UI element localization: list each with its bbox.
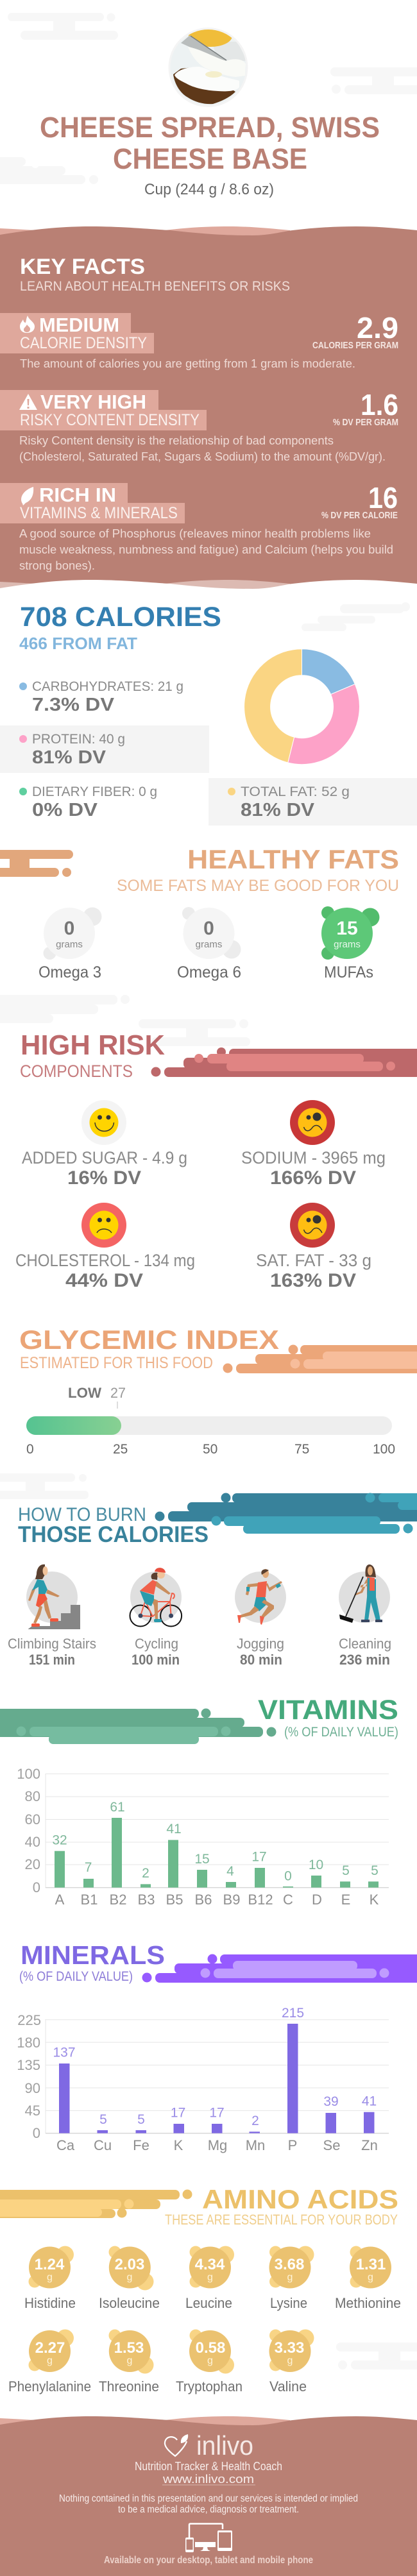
bar chart: vitamins: 40 <box>25 1834 40 1850</box>
amino acid: methionine <box>335 2246 401 2311</box>
fact: calorie density: CALORIE DENSITY <box>20 334 147 352</box>
amino acid: tryptophan: Tryptophan <box>176 2378 243 2394</box>
glycemic index gauge <box>26 1385 395 1457</box>
amino acid: tryptophan: 0.58 <box>196 2339 225 2357</box>
panel: footer: Nutrition Tracker & Health Coach <box>135 2460 282 2473</box>
amino acid: lysine: g <box>287 2272 293 2283</box>
legend: macronutrients: TOTAL FAT: 52 g <box>241 784 350 799</box>
vitamins heading: (% OF DAILY VALUE) <box>284 1725 398 1740</box>
burn calories heading: THOSE CALORIES <box>18 1522 208 1547</box>
bar chart: vitamins: 2 <box>142 1866 149 1881</box>
minerals heading: (% OF DAILY VALUE) <box>19 1969 133 1984</box>
minerals heading: MINERALS <box>21 1940 165 1970</box>
bar chart: vitamins: 5 <box>342 1863 350 1878</box>
logo: inlivo <box>165 2430 253 2461</box>
glycemic index gauge: 100 <box>373 1442 395 1457</box>
amino acid: histidine: g <box>47 2272 53 2283</box>
bar chart: vitamins: 4 <box>226 1864 234 1879</box>
fact: risky content density: Risky Content density is the relationship of bad components <box>19 434 334 447</box>
glycemic index gauge: 75 <box>294 1442 309 1457</box>
omega 6 <box>177 907 241 981</box>
calories heading: 466 FROM FAT <box>19 634 137 653</box>
bar chart: minerals: 137 <box>53 2046 76 2060</box>
burn calories heading: HOW TO BURN <box>18 1504 146 1525</box>
activity: climbing stairs: Climbing Stairs <box>8 1636 96 1652</box>
bar chart: vitamins: B5 <box>166 1892 183 1908</box>
fact: risky content density: RISKY CONTENT DENSITY <box>20 411 200 429</box>
panel: key facts <box>0 226 417 597</box>
bar chart: vitamins: C <box>283 1892 293 1908</box>
omega 3: Omega 3 <box>38 963 101 981</box>
legend: macronutrients: 7.3% DV <box>32 695 115 715</box>
bar chart: minerals: 90 <box>25 2080 40 2096</box>
bar chart: minerals: 39 <box>323 2094 339 2109</box>
activity: cycling: Cycling <box>135 1636 178 1652</box>
legend: macronutrients: 0% DV <box>32 800 98 820</box>
bar chart: vitamins: 0 <box>284 1869 292 1884</box>
healthy fats heading: SOME FATS MAY BE GOOD FOR YOU <box>117 877 399 895</box>
amino acid: lysine <box>269 2246 314 2311</box>
key facts heading: KEY FACTS <box>20 255 145 279</box>
bar chart: vitamins: K <box>370 1892 379 1908</box>
fact: calorie density: CALORIES PER GRAM <box>312 341 398 351</box>
mufas <box>321 906 380 981</box>
bar chart: minerals: 180 <box>17 2035 40 2051</box>
amino acid: isoleucine: 2.03 <box>115 2256 144 2273</box>
cholesterol <box>15 1203 195 1291</box>
bar chart: vitamins: B6 <box>195 1892 212 1908</box>
bar chart: vitamins: B9 <box>223 1892 240 1908</box>
fact: vitamins and minerals: RICH IN <box>39 484 116 506</box>
saturated fat: 163% DV <box>270 1270 356 1291</box>
high risk heading: COMPONENTS <box>20 1062 133 1081</box>
food photo <box>168 25 248 107</box>
bar chart: vitamins: 41 <box>166 1822 182 1836</box>
added sugar <box>22 1100 187 1189</box>
bar chart: minerals: 5 <box>137 2112 145 2127</box>
added sugar: 16% DV <box>67 1167 141 1189</box>
glycemic index gauge: 27 <box>110 1385 126 1401</box>
fact: calorie density: The amount of calories you are getting from 1 gram is moderate. <box>20 357 355 370</box>
mufas: grams <box>334 939 361 950</box>
amino acid: methionine: 1.31 <box>356 2256 386 2273</box>
activity: cycling: 100 min <box>132 1652 180 1668</box>
vitamins heading <box>0 1695 398 1744</box>
cholesterol: 44% DV <box>65 1270 143 1291</box>
legend: macronutrients: 81% DV <box>241 800 315 820</box>
bar chart: vitamins <box>17 1766 389 1908</box>
bar chart: vitamins: B2 <box>110 1892 126 1908</box>
burn calories heading <box>18 1493 417 1547</box>
amino acid: valine <box>269 2330 314 2394</box>
bar chart: vitamins: A <box>55 1892 65 1908</box>
bar chart: minerals: Ca <box>56 2137 75 2153</box>
fact: calorie density: MEDIUM <box>39 314 119 336</box>
fact: risky content density: (Cholesterol, Saturated Fat, Sugars & Sodium) to the amount (%DV/gr). <box>19 450 386 463</box>
activity: climbing stairs <box>8 1564 96 1668</box>
bar chart: minerals: 5 <box>99 2112 107 2127</box>
amino acid: threonine: Threonine <box>99 2378 159 2394</box>
cholesterol: CHOLESTEROL - 134 mg <box>15 1251 195 1270</box>
bar chart: minerals: Fe <box>133 2137 149 2153</box>
added sugar: ADDED SUGAR - 4.9 g <box>22 1148 187 1167</box>
legend: macronutrients: DIETARY FIBER: 0 g <box>32 784 157 799</box>
title: CHEESE SPREAD, SWISS <box>40 111 380 144</box>
amino acid: tryptophan <box>176 2330 243 2394</box>
bar chart: minerals: K <box>174 2137 183 2153</box>
bar chart: vitamins: B1 <box>81 1892 98 1908</box>
amino acid: leucine <box>185 2246 234 2311</box>
amino acids heading <box>0 2184 398 2228</box>
glycemic index gauge: 0 <box>26 1442 34 1457</box>
disclaimer <box>59 2493 358 2515</box>
fact: risky content density: % DV PER GRAM <box>333 418 398 428</box>
bar chart: minerals: 215 <box>282 2006 304 2021</box>
amino acid: leucine: 4.34 <box>195 2256 225 2273</box>
minerals heading <box>19 1940 417 1984</box>
bar chart: minerals: 135 <box>17 2057 40 2073</box>
title <box>40 111 380 175</box>
legend: macronutrients <box>0 679 417 826</box>
glycemic index heading: GLYCEMIC INDEX <box>19 1325 279 1355</box>
serving size: Cup (244 g / 8.6 oz) <box>144 181 274 198</box>
fact: vitamins and minerals: muscle weakness, numbness and fatigue) and Calcium (helps you build <box>19 543 393 556</box>
bar chart: vitamins: 80 <box>25 1788 40 1804</box>
amino acid: valine: 3.33 <box>275 2339 304 2357</box>
amino acid: methionine: g <box>368 2272 373 2283</box>
bar chart: vitamins: 60 <box>25 1811 40 1827</box>
amino acid: methionine: Methionine <box>335 2295 401 2311</box>
amino acid: isoleucine: Isoleucine <box>99 2295 160 2311</box>
amino acid: lysine: Lysine <box>270 2295 307 2311</box>
amino acid: phenylalanine <box>8 2330 91 2394</box>
activity: jogging <box>235 1569 286 1668</box>
calories heading <box>19 602 221 653</box>
bar chart: minerals: 0 <box>33 2125 40 2141</box>
glycemic index heading: ESTIMATED FOR THIS FOOD <box>20 1354 213 1372</box>
amino acids heading: AMINO ACIDS <box>202 2184 398 2214</box>
sodium: SODIUM - 3965 mg <box>241 1148 386 1167</box>
amino acid: phenylalanine: 2.27 <box>35 2339 65 2357</box>
activity: cleaning <box>339 1564 391 1668</box>
fact: vitamins and minerals: 16 <box>368 481 398 514</box>
sodium: 166% DV <box>270 1167 356 1189</box>
fact: vitamins and minerals: strong bones). <box>19 559 95 572</box>
bar chart: minerals: Mg <box>208 2137 227 2153</box>
omega 6: grams <box>196 939 222 950</box>
bar chart: minerals <box>17 2006 389 2153</box>
bar chart: minerals: Zn <box>361 2137 378 2153</box>
omega 6: 0 <box>203 918 214 939</box>
icon: flame <box>20 316 35 333</box>
fact: risky content density: 1.6 <box>361 388 398 421</box>
amino acid: histidine: Histidine <box>24 2295 76 2311</box>
legend: macronutrients: CARBOHYDRATES: 21 g <box>32 679 183 694</box>
glycemic index heading <box>19 1325 417 1373</box>
bar chart: vitamins: 100 <box>17 1766 40 1782</box>
website link: www.inlivo.com <box>162 2473 254 2486</box>
activity: cleaning: 236 min <box>339 1652 390 1668</box>
fact: vitamins and minerals <box>0 481 398 572</box>
bar chart: minerals: 2 <box>251 2114 259 2128</box>
activity: cleaning: Cleaning <box>339 1636 391 1652</box>
bar chart: vitamins: 32 <box>52 1833 67 1848</box>
fact: vitamins and minerals: A good source of Phosphorus (releaves minor health problems like <box>19 527 371 540</box>
panel: footer: Available on your desktop, tablet and mobile phone <box>104 2555 313 2566</box>
icon: devices <box>185 2523 232 2552</box>
bar chart: vitamins: 17 <box>251 1850 267 1865</box>
bar chart: minerals: 17 <box>209 2106 225 2121</box>
bar chart: minerals: Cu <box>94 2137 112 2153</box>
calories heading: 708 CALORIES <box>20 602 221 632</box>
bar chart: minerals: Mn <box>246 2137 265 2153</box>
mufas: MUFAs <box>324 963 373 981</box>
amino acid: histidine: 1.24 <box>35 2256 65 2273</box>
glycemic index gauge: 50 <box>203 1442 217 1457</box>
amino acid: lysine: 3.68 <box>275 2256 304 2273</box>
amino acid: isoleucine: g <box>127 2272 132 2283</box>
amino acid: valine: g <box>287 2355 293 2366</box>
bar chart: minerals: 45 <box>25 2103 40 2119</box>
activity: jogging: 80 min <box>240 1652 282 1668</box>
amino acid: isoleucine <box>99 2246 160 2311</box>
omega 3: 0 <box>64 918 74 939</box>
logo: inlivo: inlivo <box>196 2430 253 2461</box>
sodium <box>241 1100 386 1189</box>
bar chart: vitamins: 7 <box>85 1860 92 1875</box>
amino acid: histidine <box>24 2246 76 2311</box>
bar chart: minerals: 225 <box>17 2012 41 2028</box>
bar chart: vitamins: 61 <box>110 1800 125 1815</box>
bar chart: vitamins: D <box>312 1892 322 1908</box>
bar chart: vitamins: 0 <box>33 1879 40 1895</box>
activity: cycling <box>130 1568 182 1668</box>
fact: vitamins and minerals: VITAMINS & MINERALS <box>20 504 178 522</box>
fact: risky content density <box>0 388 398 463</box>
icon: warning triangle <box>19 394 37 410</box>
amino acid: tryptophan: g <box>207 2355 213 2366</box>
vitamins heading: VITAMINS <box>258 1695 398 1725</box>
key facts heading: LEARN ABOUT HEALTH BENEFITS OR RISKS <box>20 279 290 294</box>
bar chart: vitamins: 10 <box>309 1858 323 1872</box>
donut chart <box>244 649 359 765</box>
amino acid: leucine: Leucine <box>185 2295 232 2311</box>
bar chart: vitamins: 20 <box>25 1856 40 1872</box>
amino acid: threonine: g <box>127 2355 132 2366</box>
legend: macronutrients: 81% DV <box>32 747 106 768</box>
panel: footer <box>0 2416 417 2576</box>
omega 6: Omega 6 <box>177 963 241 981</box>
amino acid: valine: Valine <box>269 2378 307 2394</box>
bar chart: vitamins: 15 <box>194 1852 210 1867</box>
amino acid: threonine <box>99 2330 159 2394</box>
bar chart: minerals: P <box>288 2137 297 2153</box>
saturated fat <box>256 1203 371 1291</box>
activity: jogging: Jogging <box>237 1636 284 1652</box>
amino acid: leucine: g <box>207 2272 213 2283</box>
fact: calorie density <box>0 311 398 370</box>
bar chart: minerals: 41 <box>362 2094 377 2109</box>
healthy fats heading <box>0 844 399 895</box>
omega 3 <box>38 907 101 981</box>
bar chart: vitamins: 5 <box>371 1863 379 1878</box>
fact: calorie density: 2.9 <box>357 311 398 344</box>
bar chart: vitamins: B3 <box>138 1892 155 1908</box>
title: CHEESE BASE <box>113 142 307 175</box>
key facts heading <box>20 255 290 294</box>
omega 3: grams <box>56 939 83 950</box>
glycemic index gauge: LOW <box>68 1385 101 1401</box>
bar chart: minerals: 17 <box>171 2106 185 2121</box>
fact: vitamins and minerals: % DV PER CALORIE <box>321 511 398 521</box>
high risk heading <box>20 1030 417 1081</box>
bar chart: vitamins: B12 <box>248 1892 273 1908</box>
bar chart: minerals: Se <box>323 2137 340 2153</box>
amino acid: threonine: 1.53 <box>114 2339 144 2357</box>
disclaimer: to be a medical advice, diagnosis or treatment. <box>118 2504 299 2515</box>
amino acid: phenylalanine: g <box>47 2355 53 2366</box>
healthy fats heading: HEALTHY FATS <box>187 844 399 874</box>
legend: macronutrients: PROTEIN: 40 g <box>32 732 125 747</box>
activity: climbing stairs: 151 min <box>29 1652 75 1668</box>
saturated fat: SAT. FAT - 33 g <box>256 1251 371 1270</box>
icon: leaf <box>21 487 33 505</box>
bar chart: vitamins: E <box>341 1892 350 1908</box>
disclaimer: Nothing contained in this presentation and our services is intended or implied <box>59 2493 358 2504</box>
fact: risky content density: VERY HIGH <box>40 391 146 413</box>
mufas: 15 <box>336 918 358 939</box>
high risk heading: HIGH RISK <box>21 1030 165 1061</box>
amino acid: phenylalanine: Phenylalanine <box>8 2378 91 2394</box>
glycemic index gauge: 25 <box>113 1442 128 1457</box>
